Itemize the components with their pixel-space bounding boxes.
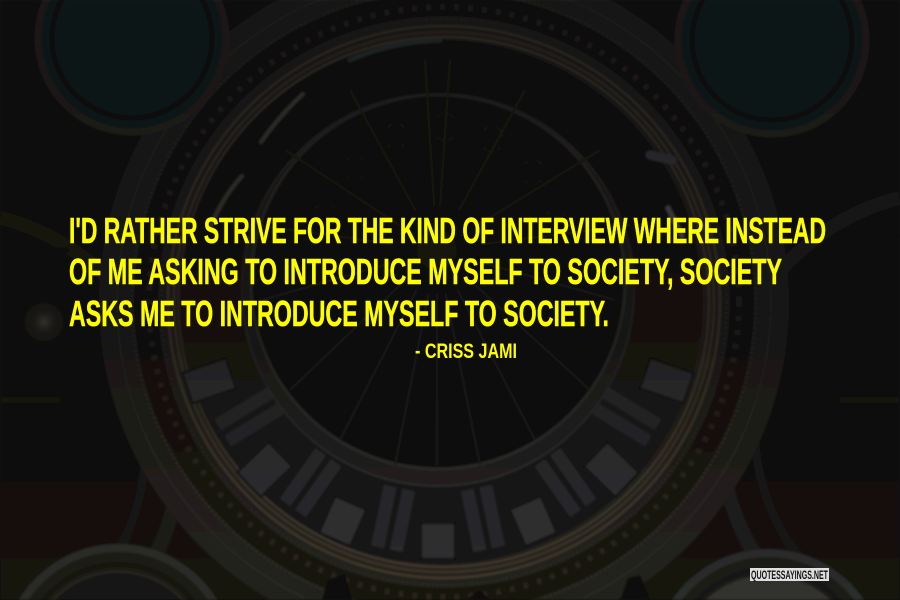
dome windows	[183, 359, 693, 558]
dome interior	[179, 40, 703, 564]
watermark: QUOTESSAYINGS.NET	[751, 568, 828, 582]
dome rim mouldings	[166, 24, 722, 580]
ornamental band	[132, 0, 756, 600]
window drum lower half pilasters	[214, 387, 662, 552]
quote line 3: ASKS ME TO INTRODUCE MYSELF TO SOCIETY.	[69, 293, 609, 334]
upper left pendentive roundel	[38, 0, 226, 132]
lower left pendentive roundel	[19, 544, 217, 600]
outer drum band	[99, 0, 789, 600]
left lamp glow	[20, 298, 68, 346]
radial ribs of the inner dome	[255, 60, 630, 465]
attribution: - CRISS JAMI	[415, 340, 517, 363]
dome coffers	[313, 113, 568, 232]
figures at lower edge	[322, 574, 650, 600]
lower right pendentive roundel	[672, 549, 864, 600]
upper lit mouldings	[211, 40, 682, 236]
lantern oculus	[393, 206, 481, 294]
quote text	[69, 210, 826, 334]
inner dome cornice	[242, 94, 634, 486]
upper right pendentive roundel	[678, 0, 866, 134]
watermark	[750, 568, 829, 582]
far side arches	[0, 190, 900, 596]
